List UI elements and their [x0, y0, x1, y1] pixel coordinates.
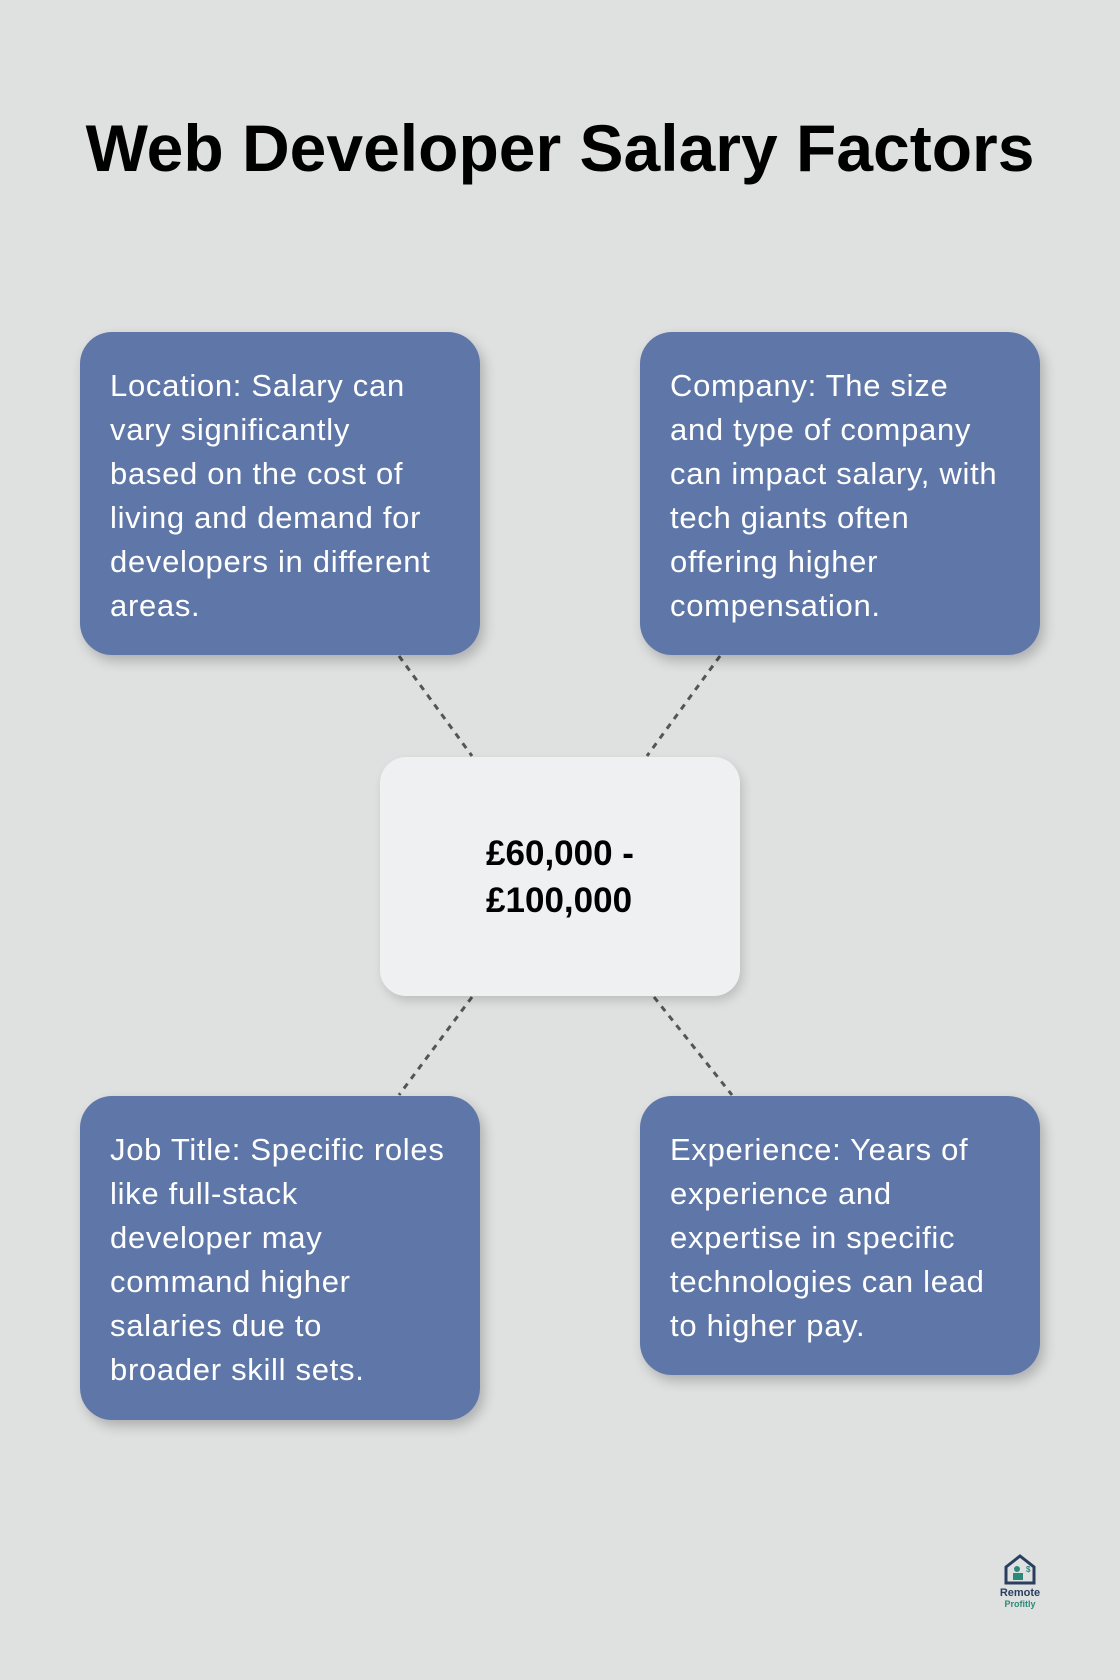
panel: experience: experience and — [670, 1176, 892, 1211]
logo: Remote — [1000, 1587, 1040, 1599]
panel: experience — [640, 1096, 1040, 1375]
panel: location: vary significantly — [110, 412, 350, 447]
panel: location: developers in different — [110, 544, 431, 579]
panel: location — [80, 332, 480, 655]
panel: job title: developer may — [110, 1220, 322, 1255]
panel: location: Location: Salary can — [110, 368, 405, 403]
panel: company — [640, 332, 1040, 655]
center salary box: £100,000 — [486, 880, 632, 920]
logo: $ — [1026, 1565, 1031, 1574]
panel: company: tech giants often — [670, 500, 909, 535]
panel: company: and type of company — [670, 412, 971, 447]
panel: experience: technologies can lead — [670, 1264, 985, 1299]
panel: company: Company: The size — [670, 368, 948, 403]
panel: location: areas. — [110, 588, 200, 623]
panel: company: compensation. — [670, 588, 881, 623]
logo: Profitly — [1004, 1599, 1036, 1609]
panel: location: living and demand for — [110, 500, 421, 535]
panel: job title — [80, 1096, 480, 1420]
panel: location: based on the cost of — [110, 456, 403, 491]
panel: company: can impact salary, with — [670, 456, 997, 491]
panel: job title: like full-stack — [110, 1176, 298, 1211]
center salary box — [380, 757, 740, 996]
title: Web Developer Salary Factors — [86, 111, 1034, 185]
panel: job title: broader skill sets. — [110, 1352, 365, 1387]
logo — [1000, 1554, 1040, 1609]
panel: company: offering higher — [670, 544, 878, 579]
panel: experience: Experience: Years of — [670, 1132, 968, 1167]
panel: experience: expertise in specific — [670, 1220, 955, 1255]
panel: job title: Job Title: Specific roles — [110, 1132, 445, 1167]
panel: job title: salaries due to — [110, 1308, 322, 1343]
panel: experience: to higher pay. — [670, 1308, 865, 1343]
panel: job title: command higher — [110, 1264, 351, 1299]
center salary box: £60,000 - — [486, 834, 634, 872]
